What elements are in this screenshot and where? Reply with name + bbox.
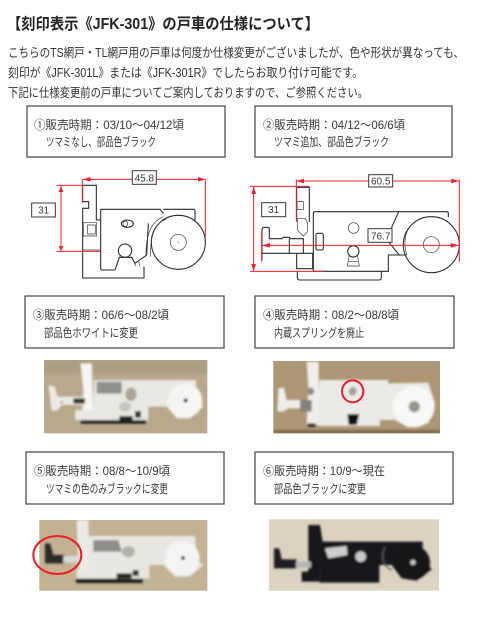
- diagram: spec 1 roller drawing: [32, 171, 205, 278]
- panel: spec 6 label: ⑥販売時期：10/9～現在: [263, 463, 385, 478]
- dimension: 31: [250, 186, 323, 271]
- panel: spec 2 label: ②販売時期：04/12～06/6頃: [263, 117, 405, 132]
- panel: spec 2 label: [255, 106, 452, 157]
- dimension: 60.5: [296, 175, 459, 262]
- panel: spec 6 label: 部品色ブラックに変更: [274, 481, 366, 496]
- dimension: 31: 31: [268, 205, 280, 216]
- panel: spec 1 label: [27, 106, 225, 157]
- dimension: 31: [32, 185, 101, 251]
- diagram: spec 2 roller drawing: [250, 175, 459, 280]
- panel: spec 5 label: [26, 452, 224, 504]
- photo: spec 5 white roller with black knob: [33, 520, 207, 591]
- title: 【刻印表示《JFK-301》の戸車の仕様について】: [7, 14, 319, 33]
- photo: spec 4 white roller with circled hole: [273, 361, 440, 433]
- panel: spec 3 label: ③販売時期：06/6～08/2頃: [33, 307, 169, 322]
- photo: spec 3 white roller: [44, 360, 207, 433]
- panel: spec 3 label: [25, 296, 224, 348]
- panel: spec 1 label: ツマミなし、部品色ブラック: [46, 134, 156, 149]
- panel: spec 5 label: ⑤販売時期：08/8～10/9頃: [34, 463, 170, 478]
- dimension: 76.7: 76.7: [371, 231, 391, 242]
- intro text: 下記に仕様変更前の戸車についてご案内しておりますので、ご参照ください。: [8, 85, 368, 100]
- panel: spec 4 label: 内蔵スプリングを廃止: [274, 326, 364, 340]
- panel: spec 1 label: ①販売時期：03/10～04/12頃: [34, 117, 184, 132]
- dimension: 76.7: [262, 229, 459, 262]
- dimension: 31: 31: [38, 206, 50, 217]
- panel: spec 3 label: 部品色ホワイトに変更: [44, 325, 138, 340]
- panel: spec 4 label: ④販売時期：08/2～08/8頃: [263, 307, 399, 322]
- callout: red circle: [342, 380, 363, 402]
- panel: spec 6 label: [255, 452, 453, 504]
- panel: spec 4 label: [255, 296, 454, 348]
- intro text: 刻印が《JFK-301L》または《JFK-301R》でしたらお取り付け可能です。: [8, 65, 363, 80]
- dimension: 45.8: [82, 171, 205, 237]
- dimension: 45.8: 45.8: [135, 174, 154, 185]
- photo: spec 6 black roller: [269, 519, 439, 591]
- dimension: 60.5: 60.5: [371, 177, 391, 188]
- panel: spec 5 label: ツマミの色のみブラックに変更: [46, 481, 168, 496]
- panel: spec 2 label: ツマミ追加、部品色ブラック: [274, 134, 389, 149]
- callout: red ellipse: [33, 536, 81, 574]
- intro text: [8, 45, 464, 100]
